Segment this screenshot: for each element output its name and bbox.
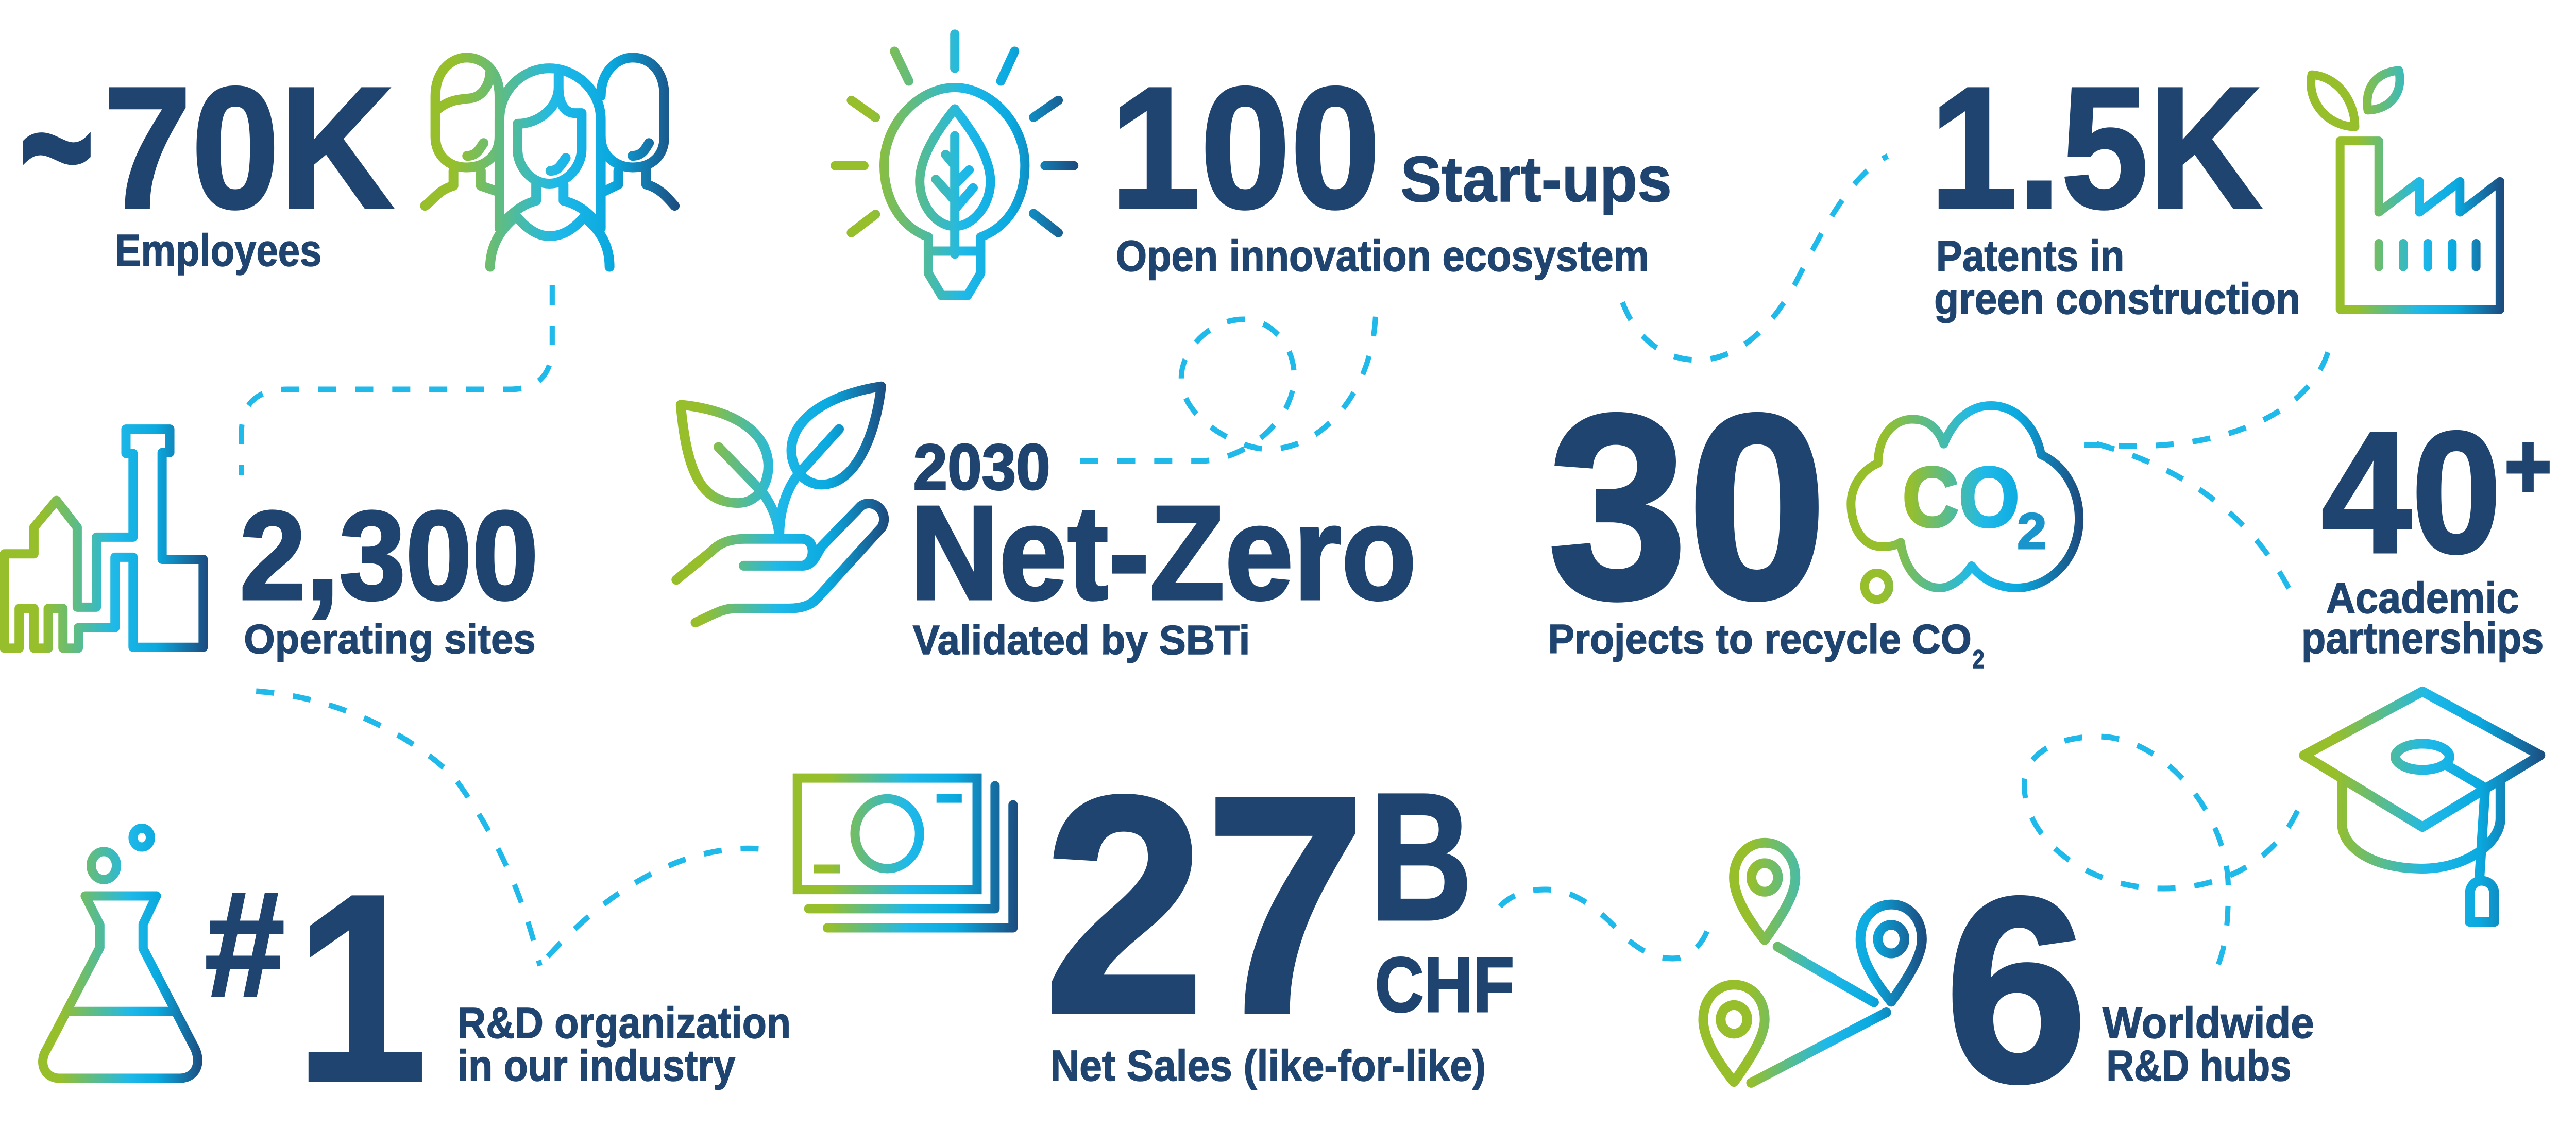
label: 2030: 2030 [913, 432, 1050, 503]
arrow: dashed loop from net-zero to start-ups [1080, 311, 1376, 461]
stat: CO2 projects [1548, 360, 1985, 674]
icon: three people [425, 58, 675, 267]
number: 40+: + [2504, 414, 2552, 518]
label: Projects to recycle CO2: 2 [1973, 645, 1985, 674]
number: 40+: 40 [2321, 396, 2501, 589]
arrow: dashed loop from graduation cap to R&D hubs [2024, 737, 2297, 966]
icon: flask [43, 828, 198, 1079]
stat: R&D organization [205, 839, 791, 1137]
label: R&D organization in our industry: in our industry [457, 1042, 735, 1090]
icon: graduation cap [2304, 691, 2540, 922]
arrow: dashed path from operating sites to R&D [256, 691, 540, 966]
icon: CO2 cloud [1851, 406, 2079, 600]
label: Patents in green construction: green construction [1934, 275, 2300, 323]
number: 2,300: 2,300 [240, 485, 538, 626]
number: 1.5K: 1.5K [1930, 52, 2262, 245]
number: 100: 100 [1110, 52, 1381, 245]
unit: B: B [1369, 756, 1472, 958]
number: #1: # [205, 861, 284, 1028]
label: Start-ups: Start-ups [1400, 144, 1672, 215]
label: Patents in green construction: Patents in [1936, 232, 2124, 281]
icon: CO2 cloud: CO [1902, 449, 2020, 544]
icon: hand holding plant [676, 386, 884, 623]
label: R&D organization in our industry [457, 999, 791, 1090]
stat: academic partnerships [2301, 396, 2552, 663]
label: Employees: Employees [115, 225, 321, 276]
arrow: dashed path from employees to operating sites [242, 285, 552, 475]
label: R&D organization in our industry: R&D organization [457, 999, 791, 1048]
label: Worldwide R&D hubs: R&D hubs [2106, 1042, 2292, 1090]
number: Net-Zero: Net-Zero [910, 478, 1417, 627]
number: #1 [205, 839, 428, 1137]
number: ~70K: 70K [104, 52, 394, 245]
stat: employees [20, 50, 394, 276]
label: Worldwide R&D hubs: Worldwide [2103, 999, 2314, 1048]
label: Academic partnerships: partnerships [2301, 614, 2544, 663]
arrow: dashed path from money to R&D [540, 848, 758, 966]
stat: net sales [1044, 732, 1514, 1090]
stat: start-ups [1110, 52, 1672, 281]
label: Academic partnerships [2301, 574, 2544, 663]
number: ~70K: ~ [20, 50, 93, 243]
icon: banknotes [798, 778, 1013, 928]
stat: patents [1930, 52, 2300, 323]
arrow: dashed path from CO2 to academic partnerships [2097, 444, 2294, 598]
label: Open innovation ecosystem: Open innovation ecosystem [1116, 232, 1649, 281]
icon: green factory [2311, 71, 2500, 310]
label: Net Sales (like-for-like): Net Sales (like-for-like) [1050, 1042, 1486, 1090]
label: Worldwide R&D hubs [2103, 999, 2314, 1090]
number: #1: 1 [295, 839, 428, 1137]
stat: net-zero [910, 432, 1417, 663]
icon: light bulb with leaf [835, 34, 1074, 296]
label: Operating sites: Operating sites [244, 616, 536, 662]
label: Academic partnerships: Academic [2326, 574, 2519, 623]
icon: CO2 cloud: 2 [2017, 503, 2046, 559]
unit: CHF: CHF [1375, 942, 1514, 1028]
arrow: dashed path from factory to CO2 [2084, 352, 2328, 446]
number: 27: 27 [1044, 732, 1366, 1077]
number: 6: 6 [1945, 843, 2088, 1136]
stat: R&D hubs [1945, 843, 2314, 1136]
arrow: dashed path from start-ups to patents [1622, 156, 1888, 360]
icon: map pins [1703, 843, 1922, 1083]
label: Validated by SBTi: Validated by SBTi [913, 617, 1250, 663]
number: 30: 30 [1548, 360, 1827, 653]
arrow: dashed path from net sales to map pins [1500, 890, 1708, 959]
label: Projects to recycle CO2: Projects to recycle CO [1548, 616, 1972, 662]
stat: operating sites [240, 485, 538, 662]
icon: industrial sites [5, 429, 203, 648]
label: Patents in green construction [1934, 232, 2300, 323]
